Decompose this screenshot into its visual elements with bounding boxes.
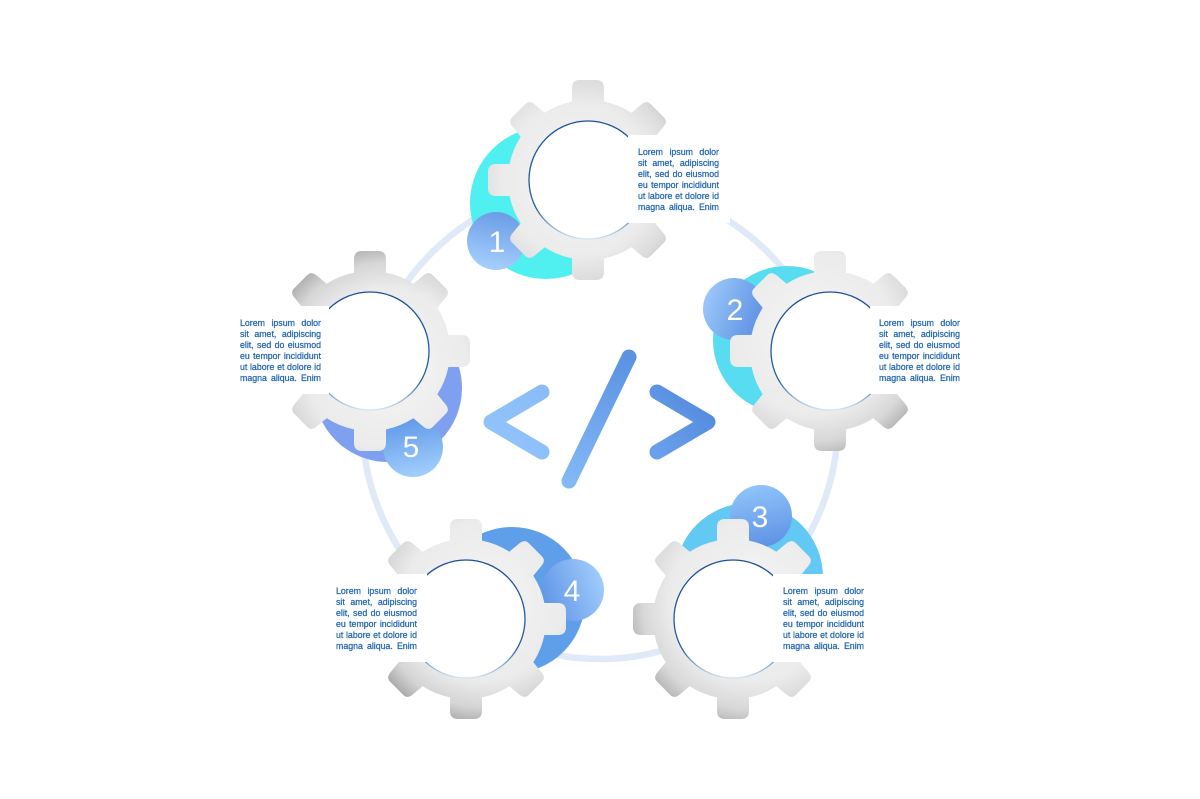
text block 2: Lorem ipsum dolor (879, 318, 960, 328)
text block 1: Lorem ipsum dolor (638, 147, 719, 157)
blob 1 (470, 127, 622, 279)
number 3: 3 (752, 501, 768, 534)
text block 3: elit, sed do eiusmod (783, 608, 864, 618)
text block 4 (332, 574, 427, 662)
text block 3 (773, 574, 868, 662)
text block 3: magna aliqua. Enim (783, 641, 864, 651)
greater-than bracket (657, 392, 708, 452)
text block 2: magna aliqua. Enim (879, 373, 960, 383)
text block 3: eu tempor incididunt (783, 619, 864, 629)
text block 5: eu tempor incididunt (240, 351, 321, 361)
gear shape 3 (633, 519, 833, 719)
gear shape 4 (366, 519, 566, 719)
slash (569, 357, 629, 481)
blob 4 (439, 527, 585, 673)
text block 4: Lorem ipsum dolor (336, 586, 417, 596)
text block 4: ut labore et dolore id (336, 630, 417, 640)
less-than bracket (491, 392, 542, 452)
gear 5 (270, 251, 470, 477)
text block 1: ut labore et dolore id (638, 191, 719, 201)
text block 4: elit, sed do eiusmod (336, 608, 417, 618)
text block 3: Lorem ipsum dolor (783, 586, 864, 596)
text block 4: sit amet, adipiscing (336, 597, 417, 607)
number badge 1 (467, 212, 525, 270)
text block 1 (628, 135, 730, 223)
text block 1: elit, sed do eiusmod (638, 169, 719, 179)
blob 5 (314, 314, 462, 462)
text block 2 (870, 306, 965, 394)
text block 1: magna aliqua. Enim (638, 202, 719, 212)
number badge 3 (730, 485, 792, 547)
text block 5: ut labore et dolore id (240, 362, 321, 372)
number 1: 1 (489, 226, 505, 259)
gear shape 1 (488, 80, 688, 280)
text block 2: sit amet, adipiscing (879, 329, 960, 339)
gear 3 (633, 485, 833, 719)
blob 3 (675, 503, 823, 651)
text block 4: eu tempor incididunt (336, 619, 417, 629)
text block 2: eu tempor incididunt (879, 351, 960, 361)
text block 2: ut labore et dolore id (879, 362, 960, 372)
number badge 4 (542, 559, 604, 621)
gear 1 (467, 80, 688, 280)
number 2: 2 (727, 294, 743, 327)
connecting ring (362, 183, 838, 659)
number 4: 4 (564, 575, 580, 608)
text block 1: eu tempor incididunt (638, 180, 719, 190)
text block 3: ut labore et dolore id (783, 630, 864, 640)
gear 2 (703, 251, 930, 451)
text block 5: Lorem ipsum dolor (240, 318, 321, 328)
text block 5 (234, 306, 329, 394)
number 5: 5 (403, 431, 419, 464)
blob 2 (713, 266, 861, 414)
gear shape 5 (270, 251, 470, 451)
text block 5: sit amet, adipiscing (240, 329, 321, 339)
text block 4: magna aliqua. Enim (336, 641, 417, 651)
gear shape 2 (730, 251, 930, 451)
text block 5: elit, sed do eiusmod (240, 340, 321, 350)
gear 4 (366, 519, 604, 719)
text block 3: sit amet, adipiscing (783, 597, 864, 607)
text block 2: elit, sed do eiusmod (879, 340, 960, 350)
icon: code symbol (491, 357, 708, 481)
text block 1: sit amet, adipiscing (638, 158, 719, 168)
number badge 5 (383, 417, 443, 477)
number badge 2 (703, 278, 765, 340)
text block 5: magna aliqua. Enim (240, 373, 321, 383)
